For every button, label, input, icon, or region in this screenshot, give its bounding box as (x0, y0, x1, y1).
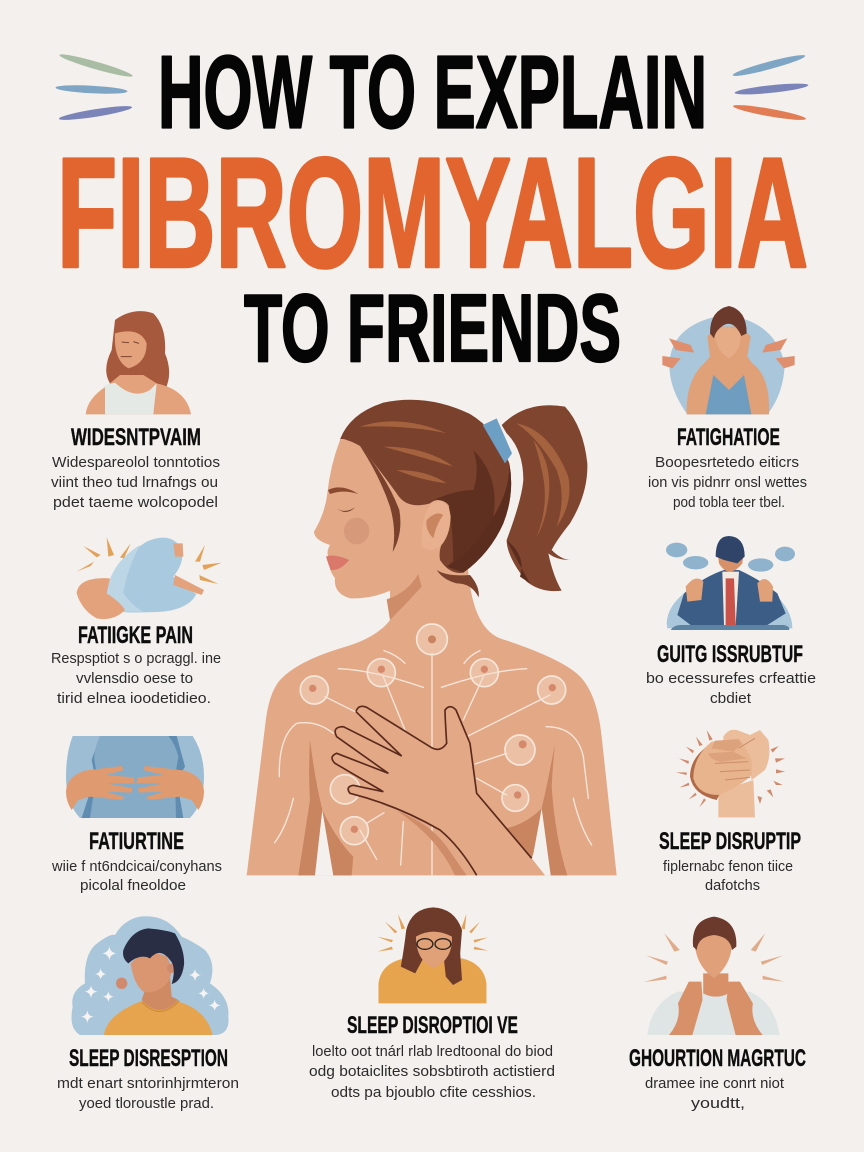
text block: mdt enart sntorinhjrmteron (57, 1076, 239, 1092)
text block (51, 455, 220, 511)
icon: woman with long hair (86, 311, 191, 414)
text block: Widespareolol tonntotios (52, 455, 220, 471)
text block: vvlensdio oese to (76, 671, 193, 687)
text block: yoed tloroustle prad. (79, 1096, 214, 1112)
icon: man in suit (666, 536, 795, 630)
text block: youdtt, (691, 1096, 745, 1112)
ponytail (502, 405, 587, 591)
heading: FATIIGKE PAIN (78, 622, 193, 649)
ear (421, 502, 451, 550)
panel: widespread pain (51, 311, 220, 511)
tender points (300, 624, 566, 845)
text block: cbdiet (710, 691, 751, 707)
text block: odg botaiclites sobsbtiroth actistierd (309, 1064, 555, 1080)
text block (646, 671, 816, 707)
icon: right brush strokes (732, 52, 809, 123)
text block: tirid elnea ioodetidieo. (57, 691, 211, 707)
panel: fatiurtine (51, 736, 222, 894)
text block (648, 455, 807, 511)
hair (340, 400, 511, 573)
text block: pod tobla teer tbel. (673, 495, 785, 511)
panel: guitg issrubtuf (646, 536, 816, 707)
panel: sleep disrespition (57, 916, 239, 1112)
heading: SLEEP DISROPTIOI VE (347, 1012, 518, 1039)
text block: odts pa bjoublo cfite cesshios. (331, 1085, 536, 1101)
icon: woman with glasses (377, 907, 488, 1003)
heading: SLEEP DISRESPTION (69, 1045, 228, 1072)
hand (332, 706, 545, 875)
eyebrow and eye (328, 487, 358, 494)
title (57, 34, 808, 382)
text block: viint theo tud lrnafngs ou (51, 475, 218, 491)
text block: bo ecessurefes crfeattie (646, 671, 816, 687)
icon: clasped fist with rays (676, 730, 785, 817)
heading: FATIURTINE (89, 828, 184, 855)
panel: fatighatioe (648, 306, 807, 511)
title: TO FRIENDS (244, 275, 621, 382)
text block: ion vis pidnrr onsl wettes (648, 475, 807, 491)
text block (663, 859, 793, 894)
icon: hands on torso (66, 736, 204, 818)
panel: sleep disroptioi ve (309, 907, 555, 1101)
text block: fiplernabc fenon tiice (663, 859, 793, 875)
text block: picolal fneoldoe (80, 878, 186, 894)
hair strand (360, 446, 400, 552)
hair band (483, 418, 512, 463)
text block: loelto oot tnárl rlab lredtoonal do biod (312, 1044, 553, 1060)
icon: woman holding head (662, 306, 795, 414)
icon: left brush strokes (55, 51, 134, 123)
text block (51, 651, 221, 707)
panel: ghourtion magrtuc (629, 917, 806, 1112)
tender point lines (275, 651, 592, 875)
panel: fatigue pain (51, 537, 222, 707)
icon: blanket with hands (77, 537, 222, 619)
text block: Boopesrtetedo eiticrs (655, 455, 799, 471)
body shadows (298, 740, 322, 875)
text block (645, 1076, 784, 1112)
text block (309, 1044, 555, 1101)
icon: person with stars (71, 916, 229, 1035)
text block: dramee ine conrt niot (645, 1076, 784, 1092)
text block: Respsptiot s o pcraggl. ine (51, 651, 221, 667)
head (314, 440, 473, 598)
lips (326, 556, 349, 570)
text block: wiie f nt6ndcicai/conyhans (51, 859, 222, 875)
central figure: woman with tender points (247, 400, 617, 875)
text block: dafotchs (705, 878, 760, 894)
heading: FATIGHATIOE (677, 424, 780, 451)
icon: man with hands at neck (644, 917, 784, 1035)
text block: pdet taeme wolcopodel (53, 495, 218, 511)
text block (51, 859, 222, 894)
cheek (344, 518, 369, 544)
body (247, 557, 617, 875)
heading: WIDESNTPVAIM (71, 424, 201, 451)
panel: sleep disruptip (659, 730, 801, 894)
text block (57, 1076, 239, 1112)
